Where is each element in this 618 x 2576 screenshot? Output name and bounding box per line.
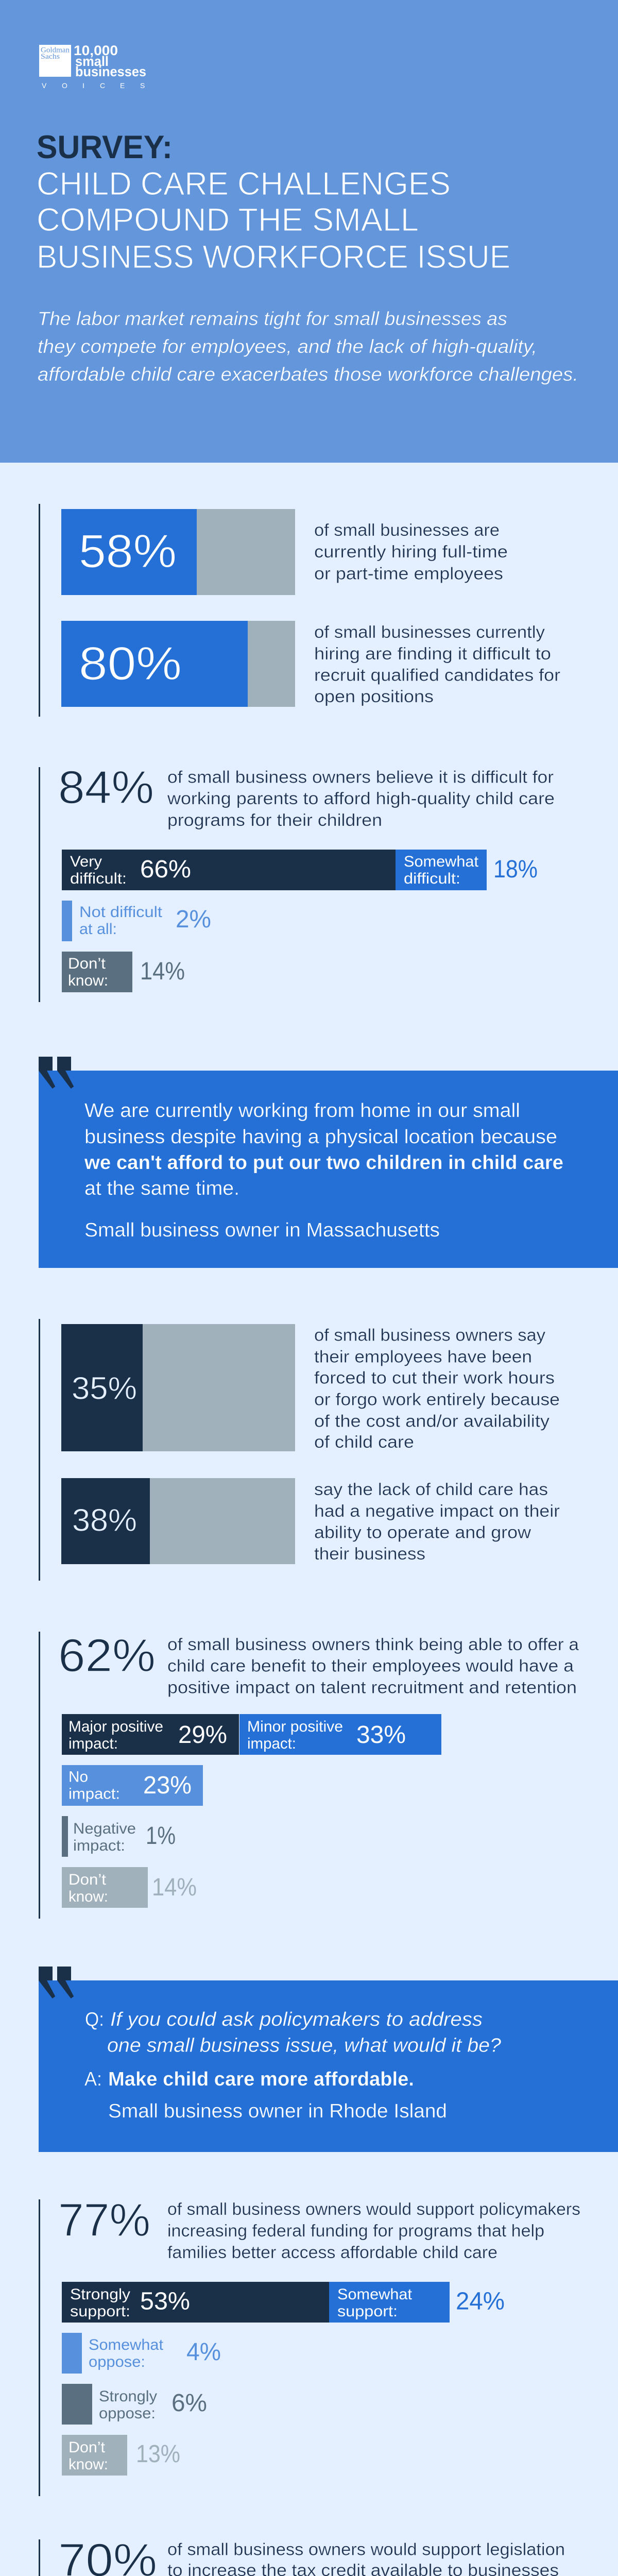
- bar: strongly oppose 6%: oppose:: [99, 2405, 156, 2422]
- bar: somewhat difficult 18%: 18%: [493, 856, 538, 883]
- bar: somewhat support 24%: support:: [337, 2303, 398, 2320]
- text: 58% description: currently hiring full-time: [314, 542, 508, 561]
- text: 35% description: forced to cut their work hours: [314, 1368, 555, 1387]
- panel: 70% support tax credit legislation: [39, 2535, 565, 2576]
- bar: very difficult 66%: Very: [70, 853, 102, 870]
- quote text: We are currently working from home in our small: [84, 1100, 520, 1122]
- bar: negative impact 1%: impact:: [73, 1837, 125, 1854]
- text: 58% description: or part-time employees: [314, 564, 503, 583]
- text: 38% description: [314, 1480, 560, 1563]
- text: 80% description: hiring are finding it difficult to: [314, 644, 551, 663]
- description: [167, 768, 555, 829]
- bar: negative impact 1%: 1%: [146, 1822, 176, 1850]
- text: 38% description: had a negative impact on their: [314, 1501, 560, 1520]
- bar: negative impact 1%: Negative: [73, 1820, 136, 1837]
- bar: don't know 13%: know:: [68, 2456, 108, 2473]
- question and answer text: A:: [84, 2069, 102, 2090]
- description: increasing federal funding for programs that help: [167, 2221, 544, 2240]
- title: [37, 129, 510, 275]
- intro text: The labor market remains tight for small businesses as: [38, 308, 507, 329]
- question and answer text: If you could ask policymakers to address: [110, 2009, 483, 2030]
- panel: 84% difficult to afford child care: [39, 762, 555, 1002]
- bar: not difficult at all 2%: at all:: [79, 921, 117, 938]
- bar: minor positive impact 33%: impact:: [247, 1735, 296, 1752]
- text: 38% description: their business: [314, 1544, 425, 1563]
- big number 62%: 62%: [58, 1630, 156, 1682]
- bar: 38% negative impact: 38%: [72, 1502, 137, 1537]
- bar: 80% finding it difficult to recruit: [61, 621, 295, 707]
- bar: somewhat difficult 18%: [396, 850, 538, 890]
- bar: strongly support 53%: Strongly: [70, 2286, 130, 2303]
- bar: strongly oppose 6%: [62, 2384, 207, 2425]
- text: 80% description: [314, 622, 560, 706]
- bar: don't know 14%: 14%: [140, 958, 185, 985]
- bar: somewhat oppose 4%: oppose:: [89, 2353, 145, 2370]
- bar: major positive impact 29%: [62, 1714, 239, 1755]
- description: of small business owners would support legislation: [167, 2540, 565, 2558]
- text: 35% description: their employees have been: [314, 1347, 532, 1366]
- intro text: affordable child care exacerbates those workforce challenges.: [38, 364, 578, 385]
- quote text: Small business owner in Massachusetts: [84, 1219, 440, 1241]
- panel: quote from Massachusetts owner: [39, 1057, 618, 1268]
- description: child care benefit to their employees would have a: [167, 1656, 574, 1675]
- text: 38% description: say the lack of child care has: [314, 1480, 548, 1499]
- bar: somewhat support 24%: Somewhat: [337, 2286, 413, 2303]
- intro text: they compete for employees, and the lack of high-quality,: [38, 336, 537, 357]
- bar: no impact 23%: No: [68, 1768, 88, 1786]
- description: of small business owners think being able to offer a: [167, 1635, 579, 1654]
- bar: major positive impact 29%: impact:: [68, 1735, 118, 1752]
- bar: somewhat support 24%: [329, 2282, 505, 2323]
- description: positive impact on talent recruitment and retention: [167, 1677, 577, 1697]
- description: [167, 2199, 580, 2262]
- bar: don't know 14%: know:: [68, 972, 108, 989]
- panel: 62% child care benefit: [39, 1630, 579, 1919]
- bar: not difficult at all 2%: Not difficult: [79, 904, 163, 921]
- bar: strongly oppose 6%: 6%: [171, 2389, 207, 2417]
- bar: very difficult 66%: difficult:: [70, 870, 127, 887]
- description: [167, 2540, 565, 2576]
- panel: quote from Rhode Island owner: [39, 1967, 618, 2152]
- bar: 58% currently hiring: 58%: [79, 526, 177, 578]
- bar: strongly oppose 6%: Strongly: [99, 2388, 157, 2405]
- bar: somewhat support 24%: 24%: [456, 2287, 505, 2315]
- text: 35% description: [314, 1325, 560, 1451]
- question and answer text: Make child care more affordable.: [108, 2069, 414, 2090]
- logo: Goldman Sachs 10,000 Small Businesses Voices: [39, 43, 146, 90]
- bar: strongly support 53%: [62, 2282, 329, 2323]
- panel: hiring statistics: [39, 504, 560, 717]
- quote text: [84, 1100, 563, 1241]
- bar: very difficult 66%: [62, 850, 396, 890]
- logo: Goldman Sachs 10,000 Small Businesses Voices: 10,000: [74, 43, 118, 58]
- title: BUSINESS WORKFORCE ISSUE: [37, 239, 510, 275]
- bar: 58% currently hiring: [61, 509, 295, 595]
- bar: don't know 13%: [62, 2435, 180, 2476]
- quote text: business despite having a physical location because: [84, 1126, 557, 1148]
- bar: 38% negative impact: [61, 1478, 295, 1564]
- quote text: at the same time.: [84, 1178, 239, 1199]
- big number 84%: 84%: [58, 762, 154, 814]
- bar: don't know 14%: [62, 1867, 197, 1908]
- text: 38% description: ability to operate and grow: [314, 1523, 531, 1541]
- bar: no impact 23%: 23%: [143, 1772, 192, 1799]
- quote text: we can't afford to put our two children in child care: [84, 1152, 563, 1174]
- description: of small business owners believe it is difficult for: [167, 768, 554, 786]
- bar: not difficult at all 2%: 2%: [176, 906, 211, 933]
- title: SURVEY:: [37, 129, 173, 165]
- bar: 35% employees forced to cut hours: 35%: [72, 1370, 137, 1405]
- logo: Goldman Sachs 10,000 Small Businesses Voices: Goldman: [41, 46, 70, 55]
- bar: major positive impact 29%: Major positive: [68, 1718, 163, 1735]
- question and answer text: one small business issue, what would it be?: [107, 2035, 502, 2057]
- description: working parents to afford high-quality child care: [167, 789, 555, 808]
- bar: don't know 13%: 13%: [136, 2441, 180, 2468]
- bar: no impact 23%: [62, 1765, 203, 1806]
- description: [167, 1635, 579, 1697]
- big number 77%: 77%: [58, 2195, 150, 2246]
- description: families better access affordable child care: [167, 2243, 497, 2262]
- bar: major positive impact 29%: 29%: [178, 1721, 227, 1749]
- description: of small business owners would support policymakers: [167, 2199, 580, 2218]
- text: 35% description: of child care: [314, 1432, 414, 1451]
- text: 35% description: or forgo work entirely because: [314, 1390, 560, 1409]
- panel: 77% support federal funding: [39, 2195, 580, 2496]
- bar: strongly support 53%: support:: [70, 2303, 130, 2320]
- bar: don't know 14%: know:: [68, 1888, 108, 1905]
- bar: 35% employees forced to cut hours: [61, 1324, 295, 1451]
- header panel: [0, 0, 618, 463]
- bar: somewhat oppose 4%: Somewhat: [89, 2336, 164, 2353]
- description: programs for their children: [167, 810, 382, 829]
- bar: don't know 14%: Don’t: [68, 1871, 107, 1888]
- bar: don't know 14%: 14%: [152, 1874, 197, 1901]
- text: 35% description: of the cost and/or availability: [314, 1412, 550, 1430]
- text: 35% description: of small business owners say: [314, 1325, 546, 1345]
- bar: negative impact 1%: [62, 1816, 176, 1857]
- bar: somewhat oppose 4%: [62, 2333, 221, 2374]
- bar: strongly support 53%: 53%: [140, 2287, 190, 2315]
- bar: don't know 14%: Don’t: [68, 955, 106, 972]
- bar: not difficult at all 2%: [62, 901, 211, 941]
- intro text: [38, 308, 578, 385]
- icon: quotation mark: [39, 1967, 74, 1998]
- bar: no impact 23%: impact:: [68, 1786, 120, 1802]
- bar: don't know 14%: [62, 952, 185, 992]
- logo: Goldman Sachs 10,000 Small Businesses Voices: businesses: [75, 64, 146, 79]
- bar: minor positive impact 33%: Minor positive: [247, 1718, 343, 1735]
- panel: employee impact statistics: [39, 1319, 560, 1581]
- bar: don't know 13%: Don’t: [68, 2439, 106, 2456]
- icon: quotation mark: [39, 1057, 74, 1089]
- question and answer text: Q:: [85, 2009, 104, 2030]
- bar: somewhat difficult 18%: Somewhat: [404, 853, 479, 870]
- text: 58% description: of small businesses are: [314, 520, 500, 539]
- text: 80% description: of small businesses currently: [314, 622, 545, 641]
- title: CHILD CARE CHALLENGES: [37, 166, 451, 202]
- text: 80% description: recruit qualified candidates for: [314, 666, 560, 684]
- bar: somewhat oppose 4%: 4%: [186, 2338, 221, 2366]
- title: COMPOUND THE SMALL: [37, 202, 419, 238]
- bar: minor positive impact 33%: 33%: [356, 1721, 406, 1749]
- bar: somewhat difficult 18%: difficult:: [404, 870, 460, 887]
- bar: very difficult 66%: 66%: [140, 856, 191, 883]
- text: 80% description: open positions: [314, 687, 434, 706]
- logo: Goldman Sachs 10,000 Small Businesses Voices: small: [75, 54, 109, 69]
- text: 58% description: [314, 520, 508, 583]
- logo: Goldman Sachs 10,000 Small Businesses Voices: Sachs: [41, 53, 60, 61]
- question and answer text: Small business owner in Rhode Island: [108, 2100, 447, 2122]
- question and answer text: [84, 2009, 502, 2122]
- logo: Goldman Sachs 10,000 Small Businesses Voices: VOICES: [42, 81, 145, 90]
- bar: 80% finding it difficult to recruit: 80%: [79, 638, 182, 690]
- bar: minor positive impact 33%: [239, 1714, 441, 1755]
